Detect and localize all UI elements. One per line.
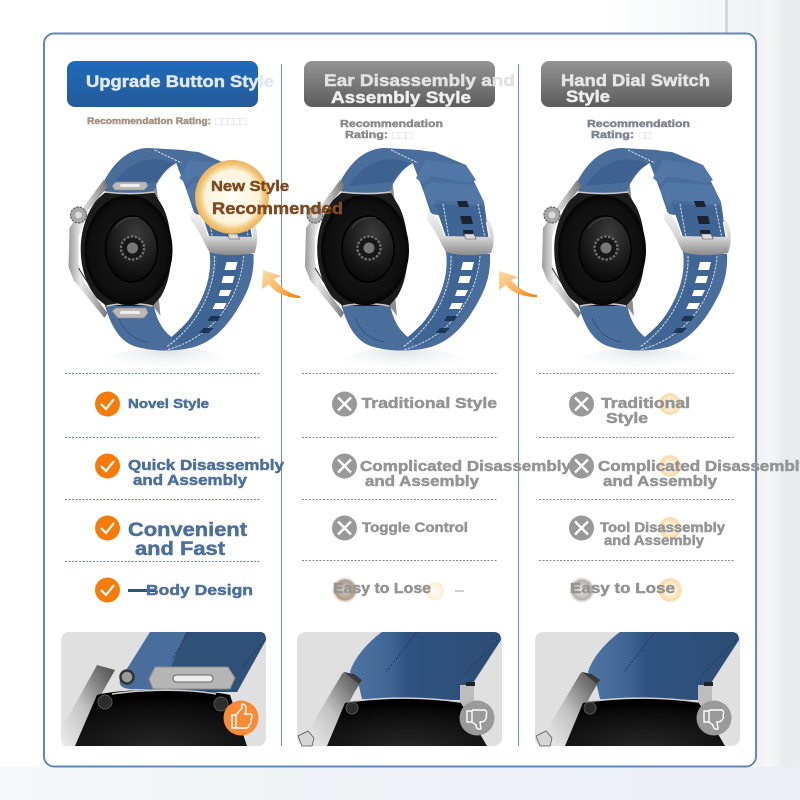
recommendation rating (340, 118, 443, 141)
item: traditional style (332, 392, 497, 416)
badge: new style recommended (195, 160, 343, 234)
recommendation rating: □□□□□ (214, 117, 247, 127)
item: complicated disassembly: and Assembly (365, 474, 479, 490)
header: ear disassembly style (304, 61, 515, 107)
watch: hand dial switch (542, 148, 731, 376)
close-up photo: upgraded button (61, 632, 266, 746)
badge: new style recommended: Recommended (212, 199, 343, 218)
item: traditional style: Style (606, 410, 648, 427)
header: upgrade button style (67, 61, 274, 107)
watch: ear disassembly (305, 148, 494, 376)
close-up photo: ear disassembly (297, 632, 502, 746)
icon: thumbs down (696, 700, 732, 736)
item: easy to lose: Easy to Lose (570, 580, 675, 597)
divider dashes (302, 374, 498, 560)
item: traditional style (569, 392, 690, 427)
item: quick disassembly and assembly: Quick Disassembly (128, 458, 284, 474)
item: convenient and fast: Convenient (128, 519, 248, 541)
header: hand dial switch style: Hand Dial Switch (561, 71, 710, 90)
recommendation rating: □□ (638, 131, 652, 141)
panel: ear disassembly and assembly style column (262, 61, 571, 746)
item: complicated disassembly: and Assembly (603, 474, 717, 490)
item: convenient and fast: and Fast (135, 538, 226, 560)
recommendation rating: Rating: (591, 129, 634, 141)
item: traditional style: Traditional (601, 395, 690, 412)
column divider right (518, 64, 519, 746)
item: easy to lose (568, 576, 683, 604)
item: easy to lose (331, 576, 464, 604)
item: body design (95, 578, 253, 602)
item: complicated disassembly (569, 454, 800, 490)
panel: hand dial switch style column (499, 61, 800, 746)
icon: thumbs down (460, 700, 494, 736)
header: upgrade button style: Upgrade Button Style (86, 72, 274, 91)
item: easy to lose: Easy to Lose (333, 580, 431, 597)
item: tool disassembly (569, 516, 726, 548)
recommendation rating: □□□ (391, 131, 413, 141)
item: complicated disassembly: Complicated Disassembly (360, 459, 571, 475)
item: tool disassembly: and Assembly (604, 533, 705, 548)
divider dashes (65, 374, 260, 562)
item: complicated disassembly (332, 454, 571, 490)
arrow: pointing to second column (499, 271, 537, 297)
item: tool disassembly: Tool Disassembly (600, 520, 726, 535)
recommendation rating (587, 118, 690, 141)
recommendation rating: Rating: (345, 129, 388, 141)
header: hand dial switch style: Style (566, 87, 610, 106)
recommendation rating: Recommendation Rating: (87, 116, 211, 127)
item: convenient and fast (95, 516, 248, 560)
item: complicated disassembly: Complicated Disassembly (598, 459, 800, 475)
recommendation rating: Recommendation (587, 118, 690, 130)
close-up photo: hand dial switch (535, 632, 740, 746)
item: novel style: Novel Style (128, 396, 209, 411)
header: ear disassembly style: Ear Disassembly and (324, 71, 515, 90)
icon: thumbs up (224, 700, 258, 736)
arrow: pointing to first column (262, 270, 300, 298)
recommendation rating: Recommendation (340, 118, 443, 130)
item: quick disassembly and assembly (95, 454, 284, 489)
item: toggle control: Toggle Control (362, 520, 468, 535)
header: hand dial switch style (541, 61, 732, 107)
panel: upgrade button style column (61, 61, 284, 746)
header: ear disassembly style: Assembly Style (331, 88, 471, 107)
item: traditional style: Traditional Style (362, 395, 497, 412)
watch: upgraded button (68, 148, 257, 376)
item: body design: Body Design (146, 582, 253, 599)
badge: new style recommended: New Style (211, 179, 289, 195)
item: novel style (95, 392, 209, 416)
divider dashes (539, 374, 734, 560)
item: toggle control (332, 516, 468, 540)
item: quick disassembly and assembly: and Assembly (133, 473, 247, 489)
column divider left (281, 64, 282, 746)
